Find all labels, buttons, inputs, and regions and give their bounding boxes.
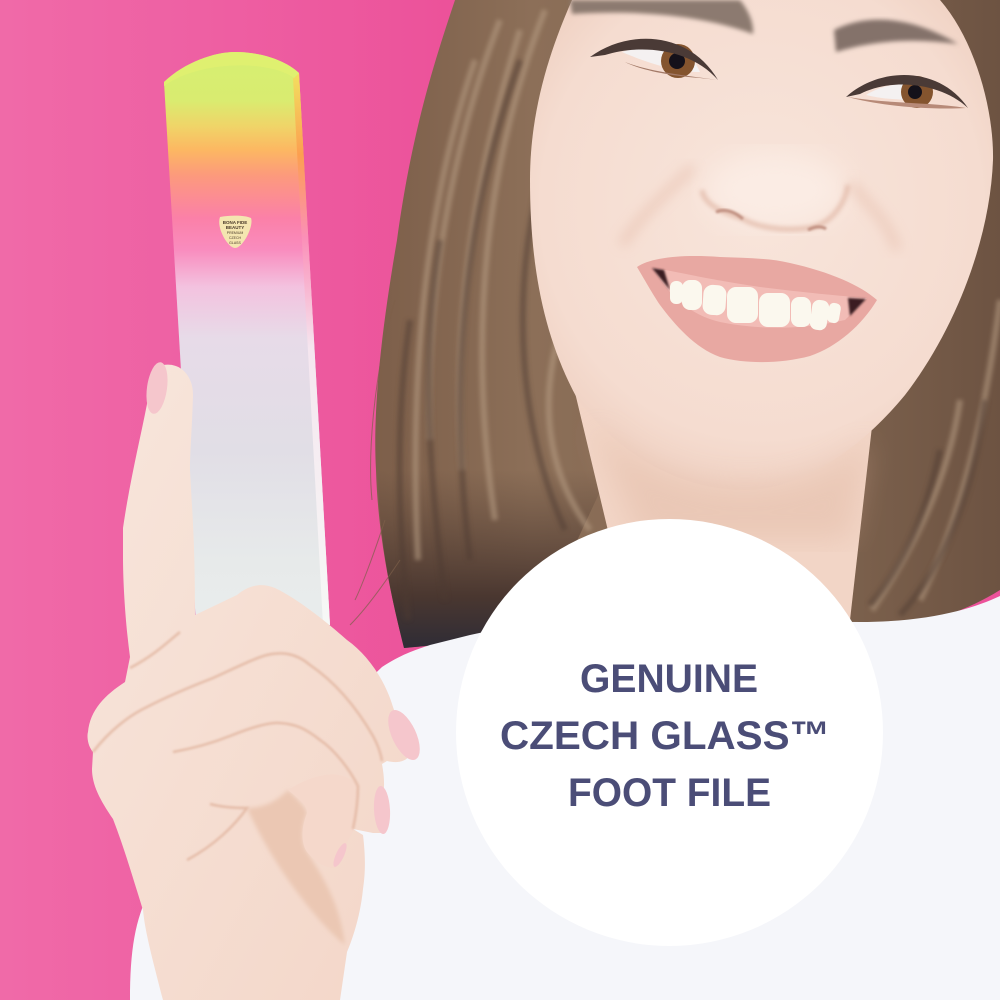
logo badge: BEAUTY [226,225,244,230]
right eye [846,75,968,109]
heading [500,657,830,815]
teeth [670,280,842,331]
glass foot file [164,52,330,625]
logo badge: BONA FIDE [223,220,247,225]
logo badge: PREMIUM [227,231,243,235]
heading: CZECH GLASS™ [500,714,830,758]
hair [350,0,1000,648]
heading: FOOT FILE [568,771,771,815]
lips [637,256,877,362]
left eye [590,39,718,80]
shirt [130,596,1000,1000]
neck [572,380,875,620]
eyebrows [570,0,958,52]
palm shadow [247,790,345,945]
hand [88,361,426,1000]
face shading [590,420,870,540]
fingertip [288,774,359,868]
finger creases [93,632,382,860]
logo badge: CZECH [229,236,241,240]
logo badge: GLASS [229,241,241,245]
nose [622,152,897,250]
heading: GENUINE [580,657,758,701]
logo badge [219,216,252,248]
face [530,0,993,490]
white circle [456,519,883,946]
fingernails [143,361,426,868]
